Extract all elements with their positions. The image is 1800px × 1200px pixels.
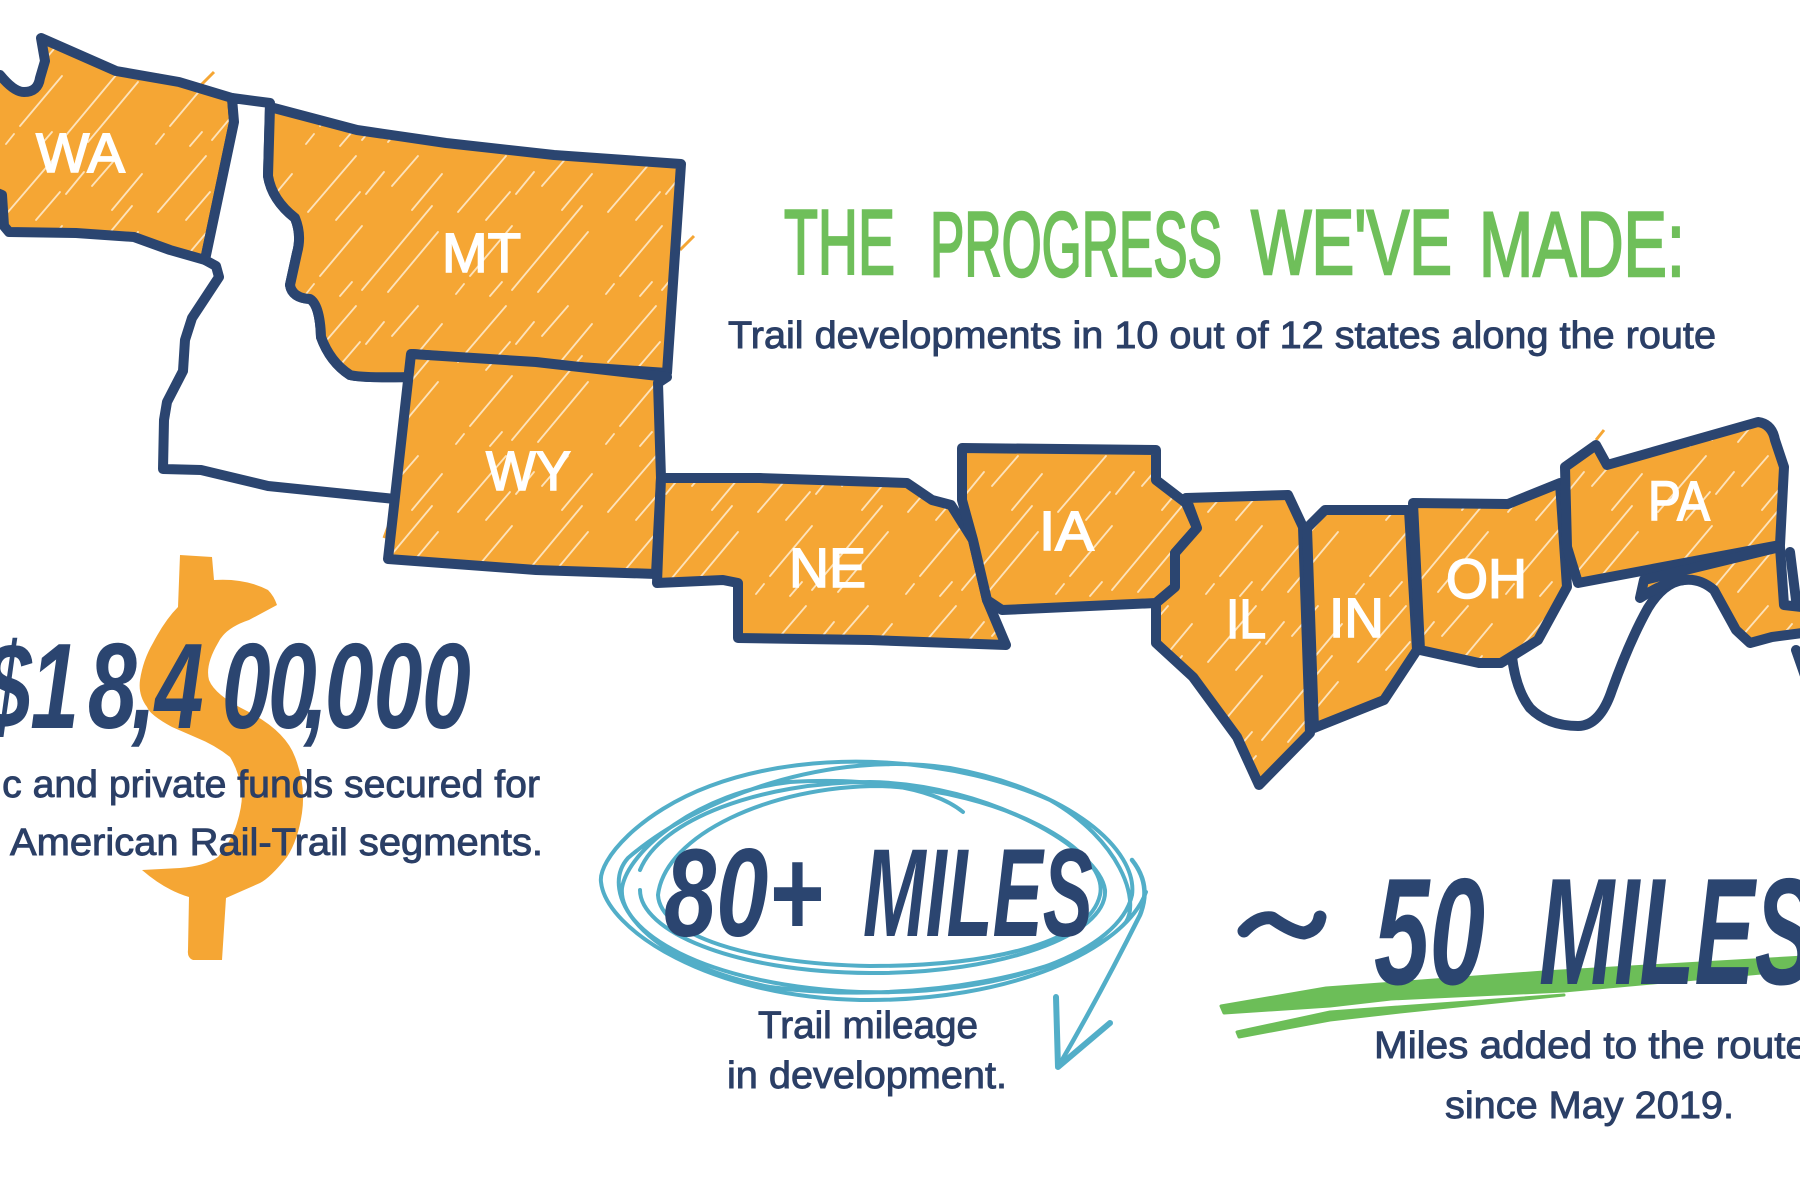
mileage description: in development.	[727, 1055, 1007, 1097]
funding description: American Rail-Trail segments.	[10, 822, 543, 864]
state: West Virginia outline	[1512, 580, 1684, 726]
state: Idaho outline	[163, 98, 411, 499]
amount: 80+	[664, 824, 823, 963]
state: Ohio	[1413, 483, 1567, 663]
tilde	[1244, 917, 1320, 933]
label: IA: IA	[1039, 499, 1095, 562]
miles added description	[1374, 1025, 1800, 1127]
state: Maryland	[1640, 547, 1800, 643]
label: IL: IL	[1226, 587, 1266, 650]
funding description	[0, 764, 543, 864]
scribble circle with arrow	[601, 762, 1146, 1067]
amount: MILES	[863, 824, 1093, 963]
subheading: Trail developments in 10 out of 12 states along the route	[728, 315, 1716, 357]
state: Indiana	[1307, 510, 1417, 728]
mileage description	[727, 1005, 1007, 1097]
mileage in development stat	[601, 762, 1146, 1097]
label: NE: NE	[789, 536, 866, 599]
label: WY: WY	[486, 439, 571, 502]
state: Wyoming	[388, 354, 667, 574]
amount	[1374, 847, 1800, 1017]
icon: dollar sign	[140, 555, 303, 960]
heading: THE	[784, 192, 895, 294]
orange overflow scribbles	[118, 70, 1604, 538]
state: Pennsylvania	[1565, 422, 1784, 583]
label: IN: IN	[1329, 586, 1384, 649]
heading	[784, 192, 1685, 296]
amount	[664, 824, 1093, 963]
green underline swoosh	[1221, 957, 1800, 1037]
state: Iowa	[962, 448, 1197, 610]
mileage description: Trail mileage	[758, 1005, 978, 1047]
map of trail states	[0, 38, 1800, 785]
state: Nebraska	[657, 478, 1006, 645]
state: Illinois	[1156, 495, 1310, 785]
miles added description: Miles added to the route	[1374, 1025, 1800, 1067]
label: PA: PA	[1648, 469, 1711, 532]
amount: 50	[1374, 847, 1485, 1017]
state edge at right	[1790, 552, 1800, 690]
heading: WE'VE	[1251, 192, 1452, 294]
label: WA: WA	[36, 121, 126, 184]
state: Montana	[268, 107, 681, 377]
heading: PROGRESS	[930, 194, 1222, 296]
label: MT: MT	[442, 221, 521, 284]
funding stat	[0, 555, 543, 960]
heading: MADE:	[1479, 194, 1685, 296]
label: OH: OH	[1446, 547, 1527, 610]
state: Washington	[0, 38, 234, 260]
miles added stat	[1221, 847, 1800, 1127]
miles added description: since May 2019.	[1445, 1085, 1734, 1127]
icon: arrow head	[1056, 997, 1110, 1067]
